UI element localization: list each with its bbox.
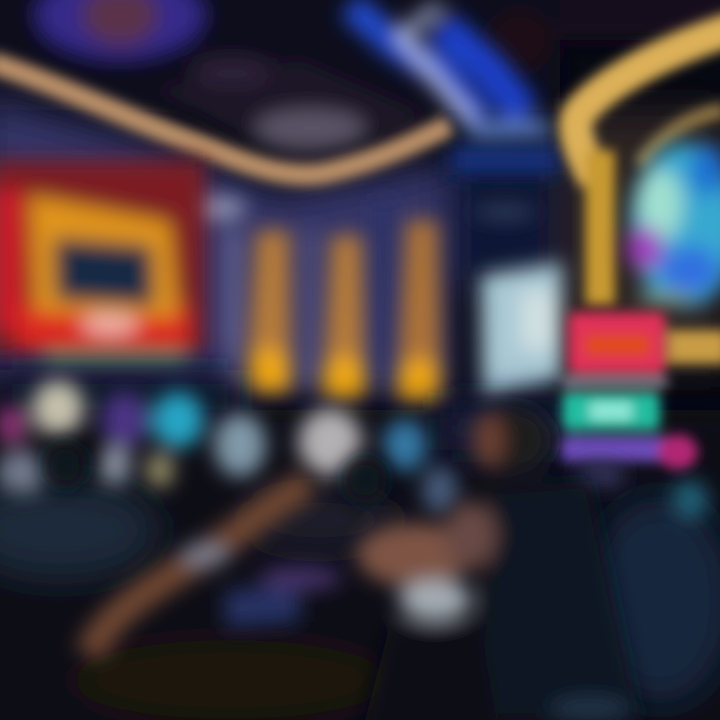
orange pillars xyxy=(245,220,442,407)
red and orange framed sign xyxy=(0,160,205,366)
hands group xyxy=(357,523,473,587)
pillar one xyxy=(245,230,292,395)
teal sign xyxy=(562,392,660,430)
pink and red sign xyxy=(568,312,666,374)
tan curved ceiling band xyxy=(0,62,450,175)
highlights on wall xyxy=(183,145,560,390)
arm reaching xyxy=(90,485,310,655)
crowd figures: heads, arms and hands xyxy=(43,406,640,720)
man head xyxy=(479,406,551,474)
seated heads xyxy=(43,441,87,489)
crowd dark base xyxy=(0,370,720,720)
pillar two xyxy=(322,235,366,400)
pale screen panel xyxy=(480,262,562,400)
gold right ledge xyxy=(668,330,720,364)
blue light streak xyxy=(350,5,550,130)
neon signs on right xyxy=(560,312,720,470)
slate wall behind the signs and pillars xyxy=(0,95,720,400)
pillar three xyxy=(396,220,442,405)
ceiling: dark panels and purple medallion xyxy=(0,0,720,170)
purple band xyxy=(560,436,670,462)
colourful stained window xyxy=(627,143,720,307)
man torso xyxy=(480,480,640,720)
crowd colourful blobs xyxy=(0,380,708,520)
gold arch and pillar xyxy=(576,28,720,305)
